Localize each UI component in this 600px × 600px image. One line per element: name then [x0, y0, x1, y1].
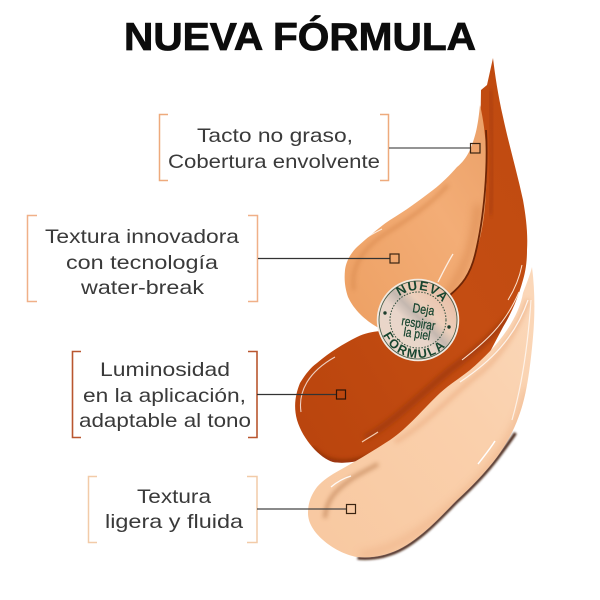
callout: textura ligera — [88, 476, 356, 542]
callout: tacto no graso — [160, 114, 480, 180]
badge: nueva fórmula: respirar — [401, 313, 437, 333]
callout: textura innovadora: con tecnología — [66, 252, 218, 274]
callout: textura innovadora: water-break — [80, 277, 204, 299]
callout: tacto no graso: Tacto no graso, — [197, 125, 353, 147]
badge: nueva fórmula: Deja — [412, 300, 436, 319]
title: NUEVA FÓRMULA — [124, 15, 476, 59]
badge: nueva fórmula: NUEVA — [396, 281, 446, 302]
swatch: medium peach — [345, 105, 487, 330]
callout: tacto no graso: Cobertura envolvente — [168, 151, 380, 173]
swatch: light beige — [308, 267, 534, 558]
callout: luminosidad: Luminosidad — [100, 359, 230, 381]
callout: luminosidad: en la aplicación, — [83, 385, 246, 407]
callout: luminosidad: adaptable al tono — [79, 410, 251, 432]
callout: textura ligera: Textura — [137, 486, 211, 508]
callout: textura innovadora — [28, 216, 399, 302]
badge: nueva fórmula — [376, 278, 460, 362]
badge: nueva fórmula: FÓRMULA — [383, 332, 445, 358]
callout: textura ligera: ligera y fluida — [105, 511, 243, 533]
badge: nueva fórmula: la piel — [403, 324, 432, 343]
swatch: dark terracotta — [295, 58, 527, 463]
callout: luminosidad — [72, 352, 346, 438]
callout: textura innovadora: Textura innovadora — [45, 226, 239, 248]
